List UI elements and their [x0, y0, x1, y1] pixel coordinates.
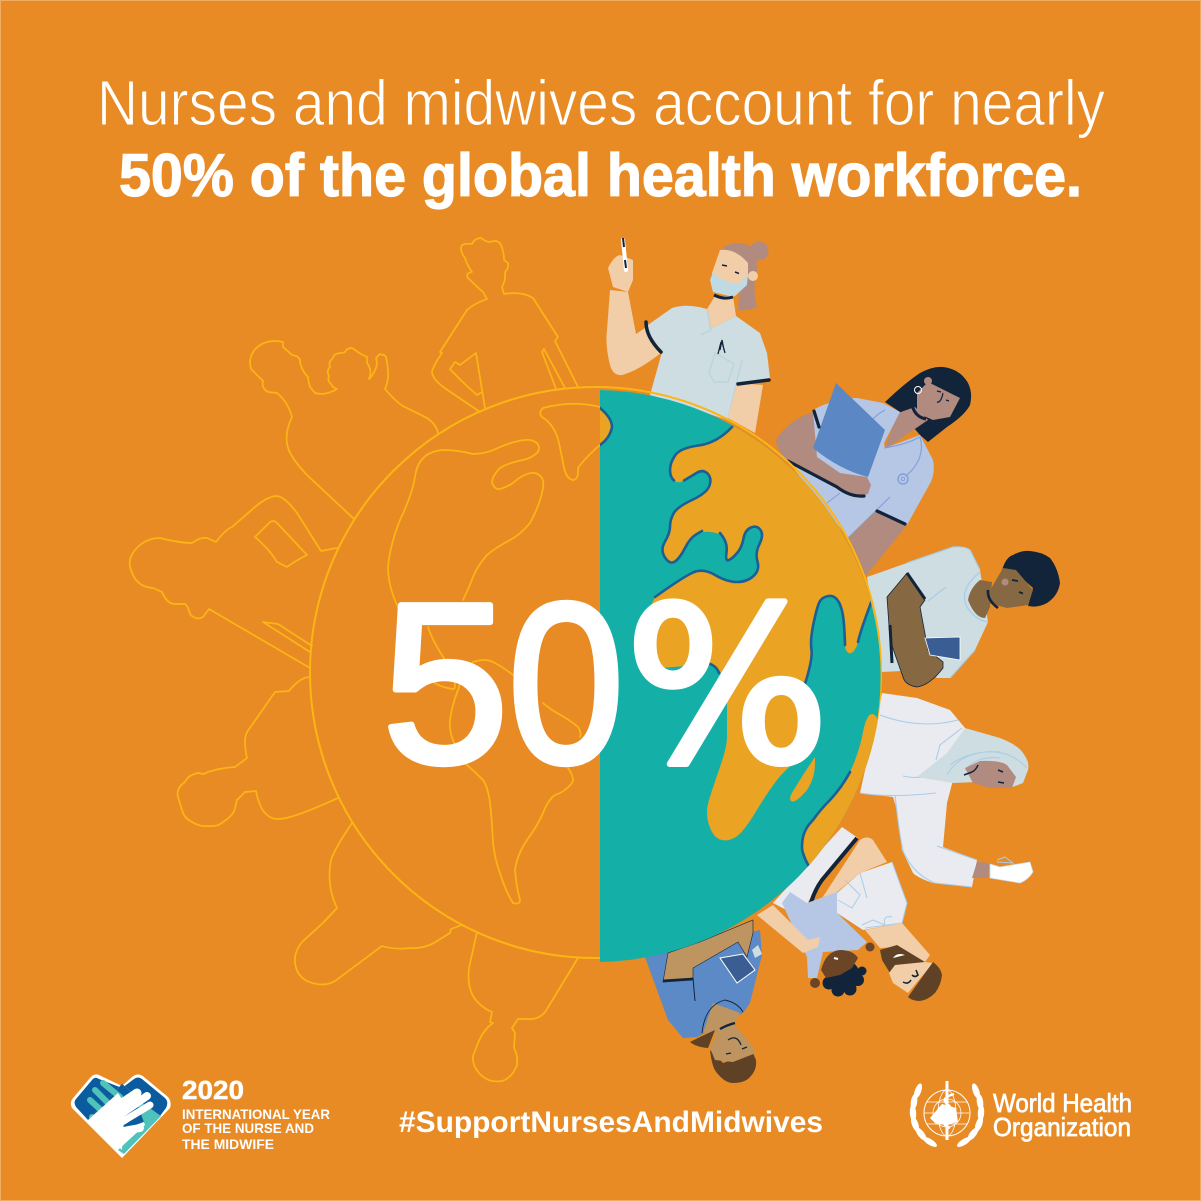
- faded outline figures on the left: [130, 238, 600, 1081]
- person: nurse with tablet: [867, 547, 1060, 687]
- outline figure: nurse with clipboard: [130, 496, 337, 668]
- title: [97, 67, 1105, 209]
- tablet: [720, 954, 755, 983]
- neck: [703, 1003, 740, 1033]
- logo text: [182, 1075, 330, 1152]
- outline figure: nurse standing at top: [432, 238, 578, 412]
- outline figure: nurse with baby: [250, 341, 438, 519]
- tablet: [925, 637, 960, 660]
- face: [988, 568, 1033, 608]
- neck and face: [885, 407, 928, 448]
- logo text: INTERNATIONAL YEAR: [182, 1106, 330, 1122]
- upper arm: [776, 412, 871, 497]
- face: [710, 1023, 756, 1062]
- person: nurse in blue scrubs with tablet: [645, 920, 762, 1083]
- logo text: 2020: [182, 1075, 244, 1105]
- hijab: [917, 728, 1028, 788]
- face: [965, 761, 1016, 788]
- outline figure: bottom person: [468, 932, 578, 1081]
- outline figure: lower arm: [295, 823, 462, 984]
- big 50 percent figure: 0: [508, 557, 624, 811]
- folder: [813, 383, 885, 477]
- hair: [690, 1030, 756, 1083]
- carer head: [880, 945, 925, 973]
- title: Nurses and midwives account for nearly: [97, 67, 1105, 139]
- person: nurse with folder: [776, 367, 971, 577]
- person: nurse with mask and thermometer: [606, 238, 770, 433]
- shirt: [645, 306, 770, 420]
- neck: [968, 580, 992, 618]
- teal half of globe: [600, 390, 881, 962]
- hair: [1002, 551, 1060, 607]
- logo text: [993, 1088, 1132, 1142]
- arm: [663, 920, 753, 982]
- lower arm: [848, 510, 907, 577]
- logo text: World Health: [993, 1088, 1132, 1118]
- baby: [782, 892, 867, 978]
- globe: [310, 387, 900, 962]
- logo text: Organization: [993, 1112, 1131, 1142]
- logo: International Year of the Nurse and the Midwife: [71, 1074, 330, 1158]
- big 50 percent figure: [382, 557, 829, 812]
- globe outline: [310, 387, 881, 958]
- logo text: OF THE NURSE AND: [182, 1120, 314, 1136]
- blue coastlines: [600, 408, 872, 868]
- neck of carer: [865, 923, 930, 962]
- nurses and midwives around the globe: [606, 238, 1060, 1083]
- arms: [887, 573, 943, 687]
- hand and glove: [972, 862, 990, 878]
- icon: WHO emblem: [909, 1081, 985, 1149]
- outline figure: health worker with fist: [178, 677, 338, 826]
- forearm: [728, 383, 763, 433]
- big 50 percent figure: 5: [382, 557, 509, 811]
- outline continents on the left half of the globe: [388, 404, 600, 904]
- person: nurse holding baby: [757, 827, 942, 1001]
- hair and bun: [723, 242, 768, 310]
- big 50 percent figure: %: [625, 561, 829, 812]
- uniform: [787, 398, 934, 538]
- title: 50% of the global health workforce.: [119, 142, 1082, 209]
- arm holding thermometer: [606, 290, 662, 375]
- gold continents: [600, 400, 900, 868]
- hashtag: #SupportNursesAndMidwives: [399, 1106, 823, 1139]
- icon: heart with hands: [71, 1074, 171, 1158]
- logo: World Health Organization: [909, 1081, 1132, 1149]
- logo text: THE MIDWIFE: [182, 1136, 274, 1152]
- person: doctor in hijab with white coat: [860, 693, 1033, 887]
